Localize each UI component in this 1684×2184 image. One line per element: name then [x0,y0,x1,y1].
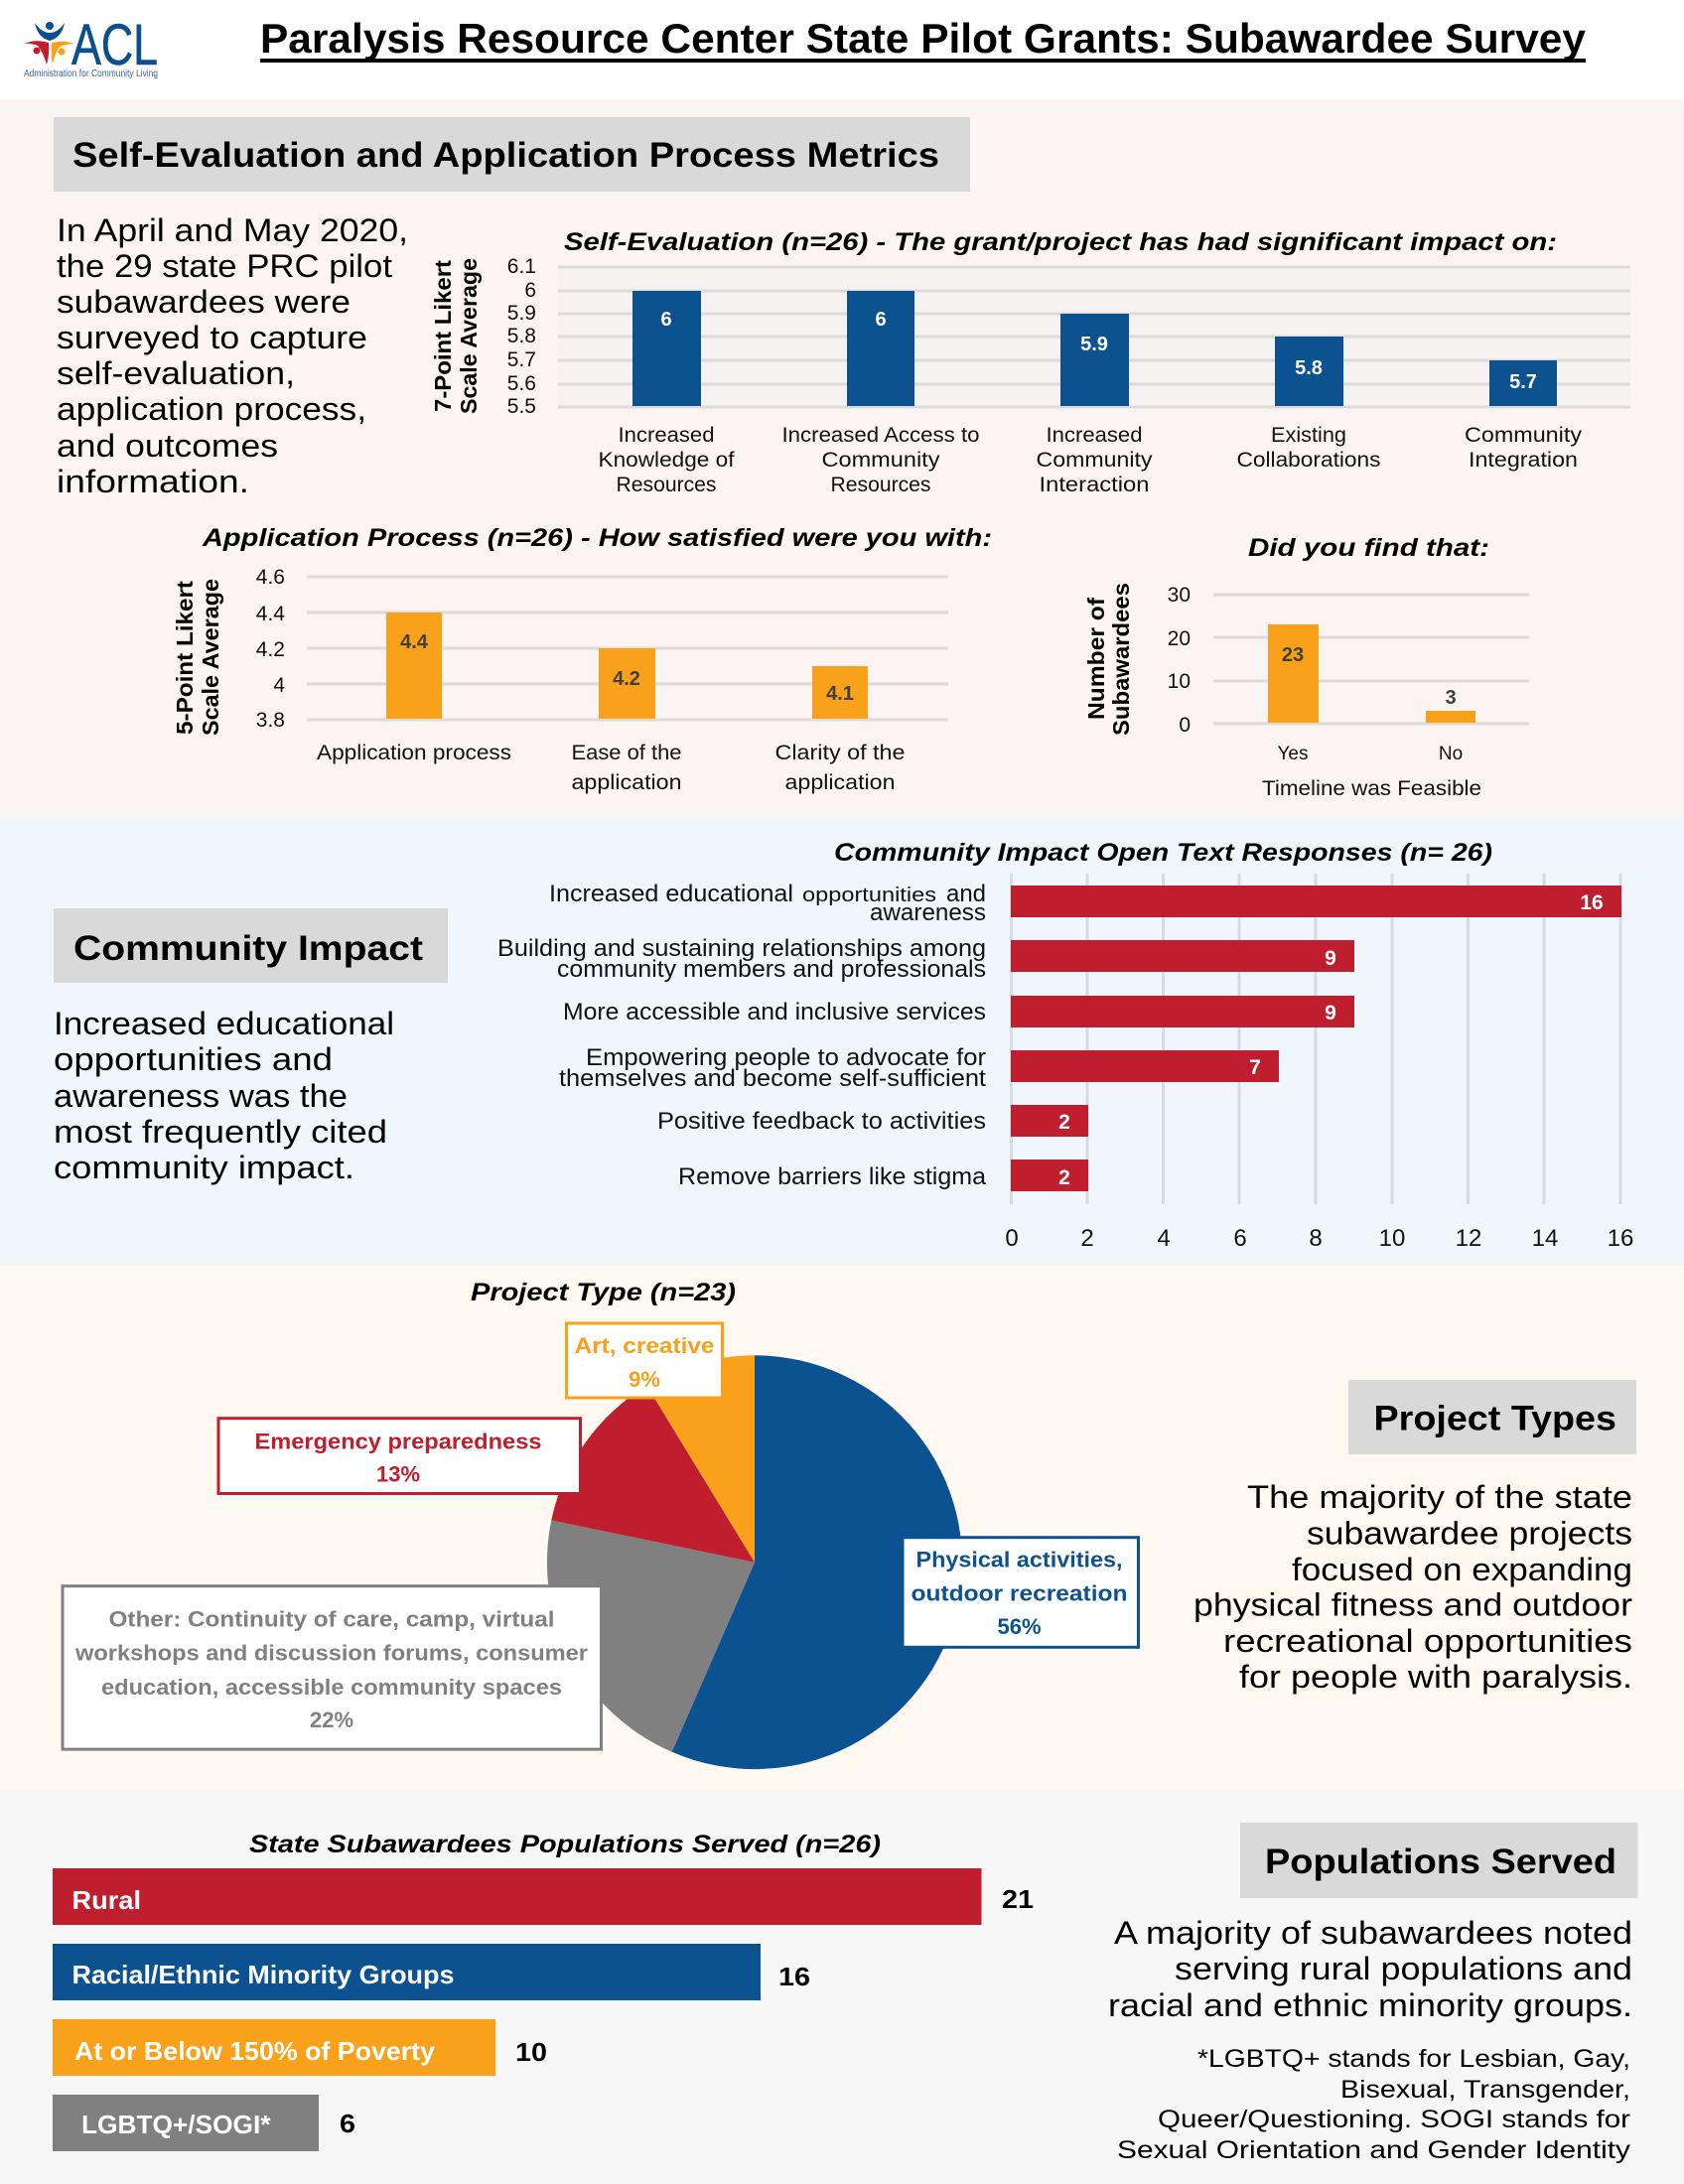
category labels: Timeline was Feasible [1262,777,1481,800]
text block: project types summary: physical fitness and outdoor [1193,1587,1632,1623]
category labels [598,424,1583,496]
category labels: Interaction [1039,474,1150,496]
bar values [400,631,854,705]
chart title: Did you find that: [1248,534,1489,562]
callout: physical activities: outdoor recreation [912,1580,1128,1606]
category labels: Increased [618,424,715,447]
callout: other: Other: Continuity of care, camp, virtual [109,1606,554,1632]
text block: survey intro [57,212,408,499]
bar values: 2 [1058,1111,1070,1134]
bar: lgbtq+/sogi: LGBTQ+/SOGI* [81,2110,271,2139]
panel: project types [0,1266,1684,1790]
y axis label [172,579,223,736]
y axis ticks: 5.8 [507,325,536,347]
panel: community impact [0,817,1684,1266]
callout: other: 22% [310,1707,353,1732]
category labels: Positive feedback to activities [657,1108,986,1135]
text block: populations summary: racial and ethnic minority groups. [1108,1987,1632,2023]
callout: physical activities [903,1538,1138,1647]
y axis label: Scale Average [456,258,482,414]
category labels: Community [1037,449,1153,472]
bar values: 4.2 [613,668,640,690]
heading: project types: Project Types [1374,1400,1616,1438]
text block: survey intro: information. [57,464,249,499]
category labels: Application process [317,742,511,764]
text block: survey intro: self-evaluation, [57,355,295,391]
chart title: Project Type (n=23) [471,1279,736,1306]
category labels [1262,744,1481,800]
y axis ticks: 5.9 [507,302,536,325]
chart: populations served bars [53,1831,1034,2151]
category labels: More accessible and inclusive services [563,999,986,1025]
bar values [660,309,1537,393]
chart: community impact open text responses [497,839,1633,1252]
bar: rural [53,1868,1034,1925]
text block: survey intro: surveyed to capture [57,320,367,355]
y axis ticks [256,566,285,732]
text block: project types summary [1193,1479,1632,1695]
y axis ticks: 4.2 [256,638,285,661]
callout: art, creative: 9% [629,1367,660,1392]
x axis ticks: 14 [1532,1225,1558,1252]
text block: community impact summary: awareness was the [54,1078,348,1114]
text block: project types summary: subawardee projects [1307,1516,1632,1552]
heading: self-evaluation and application process metrics [54,117,970,192]
y axis ticks: 0 [1179,714,1191,737]
text block: lgbtq+ footnote: Sexual Orientation and Gender Identity [1117,2136,1631,2164]
heading: community impact: Community Impact [73,929,423,968]
bars [1011,886,1621,1191]
chart title: Self-Evaluation (n=26) - The grant/project has had significant impact on: [564,228,1557,256]
y axis ticks: 3.8 [256,709,285,732]
category labels [317,742,906,794]
bar values: 6 [875,309,887,331]
category labels: themselves and become self-sufficient [559,1065,986,1092]
text block: survey intro: and outcomes [57,428,278,464]
text block: survey intro: In April and May 2020, [57,212,408,248]
y axis ticks [1168,584,1191,737]
bar: lgbtq+/sogi [53,2095,355,2151]
chart title: Application Process (n=26) - How satisfied were you with: [202,524,992,552]
text block: populations summary [1108,1915,1632,2023]
category labels: Existing [1271,424,1346,447]
callout: physical activities: Physical activities, [915,1547,1122,1571]
text block: populations summary: A majority of subawardees noted [1114,1915,1632,1951]
chart: timeline feasibility bars [1083,534,1529,800]
category labels: Knowledge of [598,449,735,472]
bar values [1282,644,1457,709]
category labels: Building and sustaining relationships among [497,935,986,962]
y axis ticks: 6 [524,279,536,302]
category labels: Clarity of the [774,742,906,764]
bar values [1058,891,1604,1189]
heading: populations served: Populations Served [1265,1843,1616,1881]
text block: survey intro: subawardees were [57,284,351,320]
bar: racial/ethnic minority groups: 16 [778,1962,810,1991]
y axis ticks: 5.5 [507,395,536,418]
bar values: 7 [1249,1056,1261,1079]
text block: populations summary: serving rural populations and [1175,1951,1632,1986]
x axis ticks: 10 [1379,1225,1405,1252]
bar: racial/ethnic minority groups: Racial/Ethnic Minority Groups [71,1960,455,1989]
bar values: 23 [1282,644,1304,666]
x axis ticks: 16 [1608,1225,1633,1252]
chart title: Community Impact Open Text Responses (n= 26) [834,839,1492,867]
y axis label [430,258,482,414]
bar: rural: 21 [1002,1884,1034,1914]
x axis ticks: 6 [1233,1225,1247,1252]
bar values: 5.8 [1295,357,1323,379]
bar values: 5.9 [1080,334,1108,355]
y axis label: Number of [1083,598,1109,720]
chart title: State Subawardees Populations Served (n=26) [249,1831,881,1858]
bar values: 4.4 [400,631,429,653]
category labels: Resources [616,474,717,496]
callout: emergency preparedness: 13% [376,1461,420,1486]
panel: self-evaluation and application process metrics [0,99,1684,817]
chart: project type pie [63,1279,1138,1769]
callout: other: workshops and discussion forums, consumer [74,1640,588,1665]
y axis ticks: 4.4 [256,603,285,625]
category labels: Remove barriers like stigma [678,1163,987,1190]
callout: emergency preparedness: Emergency preparedness [254,1429,542,1453]
x axis ticks: 12 [1456,1225,1481,1252]
logo: ACL: Administration for Community Living [24,68,158,79]
y axis ticks: 10 [1168,670,1191,693]
heading: community impact [54,908,448,983]
category labels: Integration [1469,449,1578,472]
y axis ticks: 5.7 [507,348,536,371]
y axis label: 5-Point Likert [172,581,198,735]
y axis label: Subawardees [1108,583,1134,736]
bars [1268,624,1475,723]
logo: ACL: ACL [71,13,158,77]
text block: project types summary: recreational opportunities [1223,1623,1632,1659]
text block: lgbtq+ footnote: *LGBTQ+ stands for Lesbian, Gay, [1197,2045,1630,2073]
heading: populations served [1240,1823,1638,1898]
text block: project types summary: focused on expanding [1292,1552,1632,1587]
y axis label [1083,583,1134,736]
heading: self-evaluation and application process metrics: Self-Evaluation and Application Process Metrics [72,136,939,175]
y axis ticks: 30 [1168,584,1191,607]
category labels: Increased [1047,424,1142,447]
bar values: 3 [1445,687,1457,709]
category labels: and [946,881,986,907]
category labels: Community [1465,424,1583,447]
text block: project types summary: for people with paralysis. [1239,1659,1632,1695]
x axis ticks [1005,1225,1633,1252]
page header [0,0,1684,99]
category labels: Yes [1277,744,1309,764]
bar: rural: Rural [71,1885,141,1915]
y axis ticks [507,255,536,418]
logo: ACL [24,13,158,79]
x axis ticks: 4 [1157,1225,1171,1252]
bar: at or below 150% of poverty [53,2019,547,2076]
text block: lgbtq+ footnote [1117,2045,1631,2164]
y axis ticks: 6.1 [507,255,536,278]
bar values: 6 [660,309,672,331]
category labels: application [784,771,896,794]
text block: lgbtq+ footnote: Queer/Questioning. SOGI stands for [1158,2106,1630,2133]
heading: project types [1348,1380,1636,1454]
bar values: 16 [1580,891,1604,914]
category labels: community members and professionals [557,956,986,983]
bar values: 9 [1325,947,1336,970]
chart: self-evaluation bars [430,228,1630,496]
category labels: Increased educational [549,881,793,907]
chart: application process bars [172,524,992,794]
category labels: opportunities [802,885,936,906]
text block: lgbtq+ footnote: Bisexual, Transgender, [1340,2076,1630,2104]
category labels: No [1439,744,1463,764]
category labels: Ease of the [572,742,681,764]
category labels: application [572,771,681,794]
text block: survey intro: the 29 state PRC pilot [57,248,392,284]
title: Paralysis Resource Center State Pilot Grants: Subawardee Survey [260,15,1587,62]
text block: survey intro: application process, [57,391,366,427]
callout: other: education, accessible community spaces [101,1675,562,1700]
text block: community impact summary [54,1006,394,1185]
category labels: Collaborations [1237,449,1380,472]
bars [632,291,1557,406]
x axis ticks: 8 [1309,1225,1323,1252]
y axis label: Scale Average [198,579,223,736]
callout: emergency preparedness [218,1419,580,1493]
bar: at or below 150% of poverty: At or Below 150% of Poverty [74,2036,436,2066]
bar: lgbtq+/sogi: 6 [340,2109,355,2138]
category labels [497,881,987,1190]
bars [386,613,868,719]
callout: physical activities: 56% [997,1614,1042,1639]
y axis ticks: 20 [1168,627,1191,650]
category labels: awareness [870,899,986,926]
bar values: 4.1 [826,683,854,705]
text block: community impact summary: Increased educational [54,1006,394,1041]
category labels: Empowering people to advocate for [586,1044,986,1071]
category labels: Resources [830,474,931,496]
bar values: 5.7 [1509,371,1537,393]
text block: community impact summary: most frequently cited [54,1114,387,1150]
pie slices [547,1355,962,1769]
panel: populations served [0,1790,1684,2184]
x axis ticks: 0 [1005,1225,1019,1252]
y axis ticks: 4.6 [256,566,285,589]
callout: art, creative: Art, creative [574,1333,715,1358]
y axis ticks: 4 [273,674,285,697]
bar values: 2 [1058,1166,1070,1189]
callout: other [63,1586,602,1749]
category labels: Community [822,449,940,472]
text block: community impact summary: opportunities and [54,1041,333,1077]
text block: community impact summary: community impact. [54,1150,354,1185]
callout: art, creative [566,1323,723,1398]
x axis ticks: 2 [1080,1225,1094,1252]
bar: racial/ethnic minority groups [53,1944,810,2000]
category labels: Increased Access to [782,424,979,447]
y axis ticks: 5.6 [507,372,536,395]
text block: project types summary: The majority of the state [1247,1479,1632,1515]
y axis label: 7-Point Likert [430,260,456,412]
bar values: 9 [1325,1002,1336,1024]
bar: at or below 150% of poverty: 10 [515,2037,547,2067]
